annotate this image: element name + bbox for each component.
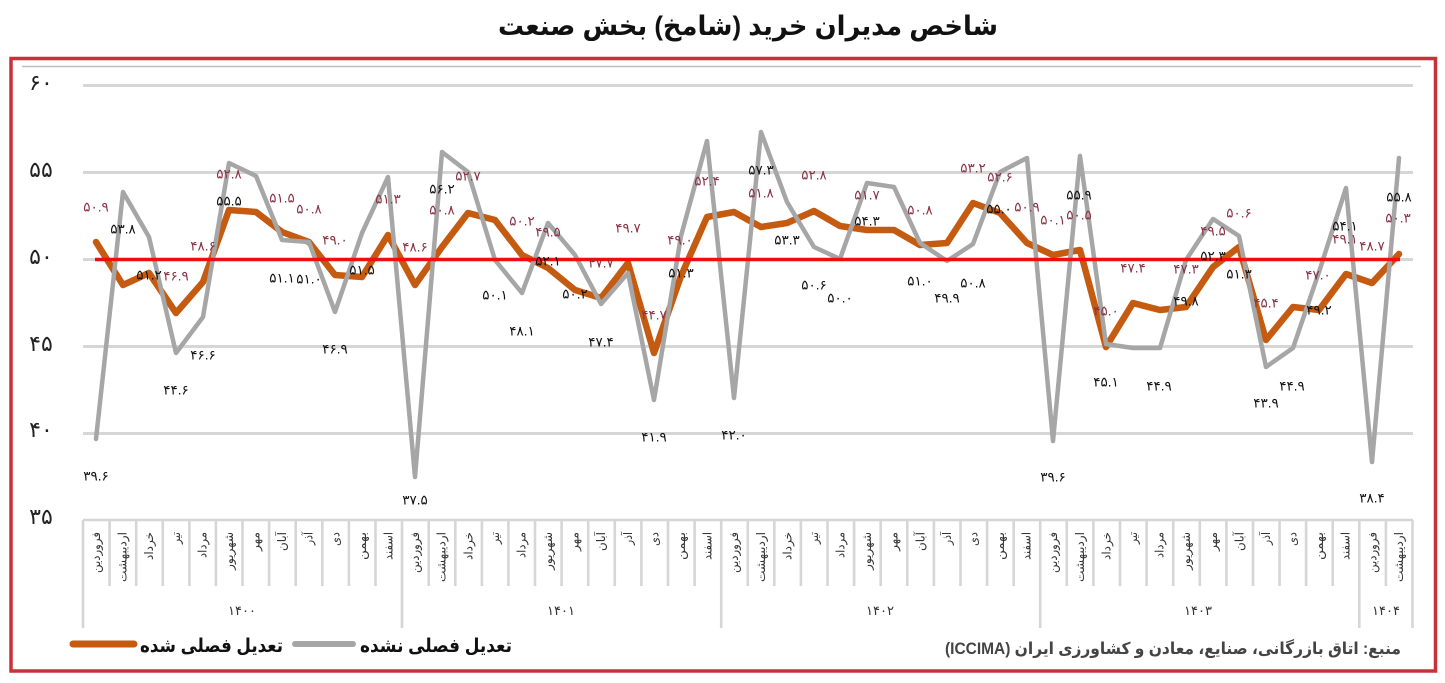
data labels: seasonally adjusted: ۴۹.۰	[322, 232, 348, 248]
data labels: not seasonally adjusted: ۴۳.۹	[1253, 396, 1279, 410]
x axis month labels: بهمن	[674, 532, 689, 560]
x axis month labels: آبان	[1231, 531, 1246, 551]
data labels: not seasonally adjusted: ۴۴.۶	[163, 382, 189, 398]
data labels: not seasonally adjusted: ۵۶.۲	[429, 182, 455, 196]
x axis month labels	[89, 531, 1407, 582]
data labels: not seasonally adjusted: ۵۳.۸	[110, 222, 136, 236]
line: seasonally adjusted (orange)	[96, 203, 1399, 353]
x axis month labels: دی	[966, 532, 980, 546]
data labels: not seasonally adjusted: ۳۹.۶	[83, 468, 109, 484]
data labels: not seasonally adjusted: ۵۱.۰	[907, 274, 933, 288]
data labels: seasonally adjusted: ۵۰.۶	[1226, 206, 1252, 220]
x axis month labels: فروردین	[727, 532, 742, 573]
data labels: seasonally adjusted: ۴۹.۵	[535, 224, 561, 240]
source note: منبع: اتاق بازرگانی، صنایع، معادن و کشاورزی ایران (ICCIMA)	[945, 638, 1401, 659]
data labels: seasonally adjusted: ۵۰.۵	[1066, 208, 1092, 222]
legend: not seasonally adjusted: تعدیل فصلی نشده	[360, 636, 512, 657]
data labels: not seasonally adjusted: ۴۹.۲	[1306, 302, 1332, 318]
data labels: not seasonally adjusted: ۵۰.۸	[960, 276, 986, 290]
y axis labels: ۴۰	[29, 417, 53, 442]
x axis month labels: اردیبهشت	[116, 532, 131, 582]
data labels: not seasonally adjusted: ۵۵.۸	[1386, 190, 1412, 204]
x axis month labels: شهریور	[1179, 532, 1194, 571]
data labels: not seasonally adjusted: ۵۰.۲	[562, 286, 588, 302]
y axis labels	[29, 70, 53, 529]
data labels: seasonally adjusted: ۵۱.۳	[375, 192, 401, 206]
x axis month labels: آذر	[301, 531, 317, 546]
x axis month labels: آبان	[593, 531, 608, 551]
data labels: seasonally adjusted: ۴۶.۹	[163, 268, 189, 284]
y axis labels: ۴۵	[29, 331, 53, 356]
x axis year labels: ۱۴۰۱	[547, 603, 575, 618]
data labels: not seasonally adjusted: ۴۴.۹	[1146, 378, 1172, 394]
x axis year labels	[228, 603, 1400, 618]
data labels: seasonally adjusted: ۴۸.۷	[1359, 238, 1385, 254]
line: not seasonally adjusted (grey)	[96, 132, 1399, 477]
data labels: not seasonally adjusted: ۵۲.۱	[535, 254, 561, 268]
data labels: not seasonally adjusted: ۴۲.۰	[721, 428, 747, 442]
x axis month labels: اسفند	[382, 532, 396, 560]
x axis month labels: اردیبهشت	[435, 532, 450, 582]
data labels: not seasonally adjusted: ۴۹.۹	[934, 290, 960, 306]
data labels: not seasonally adjusted: ۵۰.۰	[827, 290, 853, 306]
data labels: seasonally adjusted: ۵۲.۸	[216, 166, 242, 182]
data labels: seasonally adjusted: ۵۰.۳	[1385, 210, 1411, 226]
x axis month labels: خرداد	[1099, 532, 1114, 560]
data labels: seasonally adjusted: ۵۱.۸	[748, 186, 774, 200]
x axis month labels: بهمن	[355, 532, 370, 560]
data labels: seasonally adjusted: ۴۷.۰	[1305, 268, 1331, 282]
data labels: not seasonally adjusted: ۴۹.۸	[1173, 294, 1199, 308]
x axis month labels: فروردین	[408, 532, 423, 573]
data labels: seasonally adjusted: ۵۰.۱	[1040, 212, 1066, 228]
x axis month labels: مهر	[887, 532, 902, 552]
data labels: not seasonally adjusted: ۵۱.۲	[136, 268, 162, 282]
y axis labels: ۳۵	[29, 504, 53, 529]
x axis month labels: اردیبهشت	[754, 532, 769, 582]
x axis month labels: اسفند	[1020, 532, 1034, 560]
data labels: not seasonally adjusted: ۴۶.۶	[190, 348, 216, 362]
x axis month labels: فروردین	[89, 532, 104, 573]
x axis month labels: اردیبهشت	[1392, 532, 1407, 582]
data labels: seasonally adjusted: ۴۷.۷	[588, 256, 614, 270]
x axis month labels: شهریور	[222, 532, 237, 571]
x axis month labels: تیر	[1126, 532, 1141, 545]
data labels: seasonally adjusted: ۵۰.۲	[509, 214, 535, 228]
data labels: seasonally adjusted: ۵۲.۸	[801, 168, 827, 182]
data labels: not seasonally adjusted: ۵۰.۶	[801, 278, 827, 292]
data labels: seasonally adjusted: ۴۹.۷	[615, 220, 641, 236]
x axis month labels: تیر	[169, 532, 184, 545]
data labels: not seasonally adjusted: ۴۸.۱	[509, 324, 535, 338]
x axis month labels: مرداد	[514, 532, 529, 558]
data labels: seasonally adjusted: ۴۵.۰	[1093, 304, 1119, 318]
data labels: seasonally adjusted: ۵۱.۵	[269, 190, 295, 206]
x axis frame	[83, 520, 1413, 628]
x axis month labels: آذر	[1258, 531, 1274, 546]
data labels: seasonally adjusted: ۵۱.۷	[854, 188, 880, 202]
data labels: not seasonally adjusted: ۴۴.۹	[1279, 378, 1305, 394]
data labels: not seasonally adjusted: ۵۴.۱	[1332, 218, 1358, 234]
data labels: not seasonally adjusted: ۵۵.۵	[216, 194, 242, 208]
data labels: not seasonally adjusted: ۳۸.۴	[1359, 490, 1385, 506]
x axis month labels: مرداد	[834, 532, 848, 558]
data labels: seasonally adjusted: ۵۰.۸	[296, 202, 322, 216]
x axis month labels: تیر	[807, 532, 822, 545]
data labels: not seasonally adjusted: ۵۱.۵	[349, 262, 375, 278]
data labels: not seasonally adjusted: ۵۱.۱	[269, 270, 295, 286]
x axis month labels: آذر	[939, 531, 955, 546]
data labels: not seasonally adjusted: ۳۹.۶	[1040, 470, 1066, 484]
data labels: seasonally adjusted: ۴۹.۱	[1332, 232, 1358, 246]
x axis year labels: ۱۴۰۳	[1184, 603, 1212, 618]
data labels: seasonally adjusted: ۴۷.۳	[1173, 262, 1199, 276]
legend: seasonally adjusted: تعدیل فصلی شده	[140, 636, 283, 657]
x axis year labels: ۱۴۰۲	[866, 603, 894, 618]
x axis month labels: آذر	[620, 531, 636, 546]
data labels: not seasonally adjusted: ۴۷.۴	[588, 334, 614, 350]
data labels: seasonally adjusted: ۵۲.۶	[987, 170, 1013, 184]
data labels: not seasonally adjusted: ۵۷.۳	[748, 162, 774, 178]
data labels: seasonally adjusted: ۵۰.۸	[429, 202, 455, 218]
x axis month labels: تیر	[488, 532, 503, 545]
x axis month labels: خرداد	[780, 532, 795, 560]
x axis month labels: مرداد	[1153, 532, 1168, 558]
data labels: seasonally adjusted: ۴۴.۷	[641, 308, 667, 322]
x axis month labels: بهمن	[1312, 532, 1327, 560]
data labels: not seasonally adjusted: ۵۲.۳	[1200, 248, 1226, 264]
x axis month labels: آبان	[912, 531, 927, 551]
data labels: seasonally adjusted: ۵۰.۸	[907, 202, 933, 218]
data labels: not seasonally adjusted: ۵۳.۳	[774, 232, 800, 248]
title: شاخص مدیران خرید (شامخ) بخش صنعت	[498, 11, 998, 42]
data labels: seasonally adjusted: ۴۹.۵	[1200, 224, 1226, 238]
x axis month labels: فروردین	[1046, 532, 1061, 573]
data labels: not seasonally adjusted: ۵۰.۱	[482, 288, 508, 302]
x axis month labels: مهر	[1206, 532, 1221, 552]
x axis month labels: اردیبهشت	[1073, 532, 1088, 582]
data labels: seasonally adjusted: ۴۸.۶	[190, 238, 216, 254]
data labels: not seasonally adjusted: ۴۵.۱	[1093, 374, 1119, 390]
x axis month labels: دی	[1286, 532, 1300, 546]
x axis month labels: اسفند	[701, 532, 715, 560]
x axis month labels: اسفند	[1339, 532, 1353, 560]
data labels: not seasonally adjusted	[83, 162, 1412, 508]
x axis month labels: شهریور	[541, 532, 556, 571]
x axis month labels: فروردین	[1365, 532, 1380, 573]
x axis year labels: ۱۴۰۴	[1372, 603, 1400, 618]
data labels: seasonally adjusted: ۵۲.۴	[694, 174, 720, 188]
x axis month labels: مهر	[248, 532, 264, 552]
y axis labels: ۵۰	[29, 244, 53, 269]
data labels: not seasonally adjusted: ۵۱.۳	[1226, 266, 1252, 282]
x axis month labels: خرداد	[142, 532, 157, 560]
y axis labels: ۵۵	[29, 157, 53, 182]
data labels: seasonally adjusted: ۵۲.۷	[455, 168, 481, 184]
data labels: seasonally adjusted: ۵۰.۹	[83, 200, 109, 214]
x axis month labels: دی	[647, 532, 661, 546]
data labels: not seasonally adjusted: ۴۶.۹	[322, 342, 348, 356]
x axis month labels: مرداد	[195, 532, 210, 558]
data labels: seasonally adjusted	[83, 160, 1411, 322]
x axis month labels: خرداد	[461, 532, 476, 560]
data labels: not seasonally adjusted: ۵۵.۹	[1066, 188, 1092, 202]
x axis month labels: آبان	[274, 531, 289, 551]
x axis month labels: دی	[328, 532, 342, 546]
x axis year labels: ۱۴۰۰	[228, 603, 256, 618]
reference line at 50	[95, 258, 1400, 261]
data labels: seasonally adjusted: ۴۸.۶	[402, 240, 428, 254]
data labels: not seasonally adjusted: ۳۷.۵	[402, 492, 428, 508]
y axis labels: ۶۰	[29, 70, 53, 95]
data labels: not seasonally adjusted: ۵۵.۰	[986, 202, 1012, 216]
data labels: seasonally adjusted: ۴۹.۰	[667, 232, 693, 248]
data labels: not seasonally adjusted: ۵۴.۳	[854, 214, 880, 228]
data labels: not seasonally adjusted: ۴۱.۹	[641, 430, 667, 444]
x axis month labels: شهریور	[860, 532, 875, 571]
x axis month labels: بهمن	[993, 532, 1008, 560]
data labels: not seasonally adjusted: ۵۱.۳	[668, 266, 694, 280]
data labels: seasonally adjusted: ۵۰.۹	[1014, 200, 1040, 214]
x axis month labels: مهر	[568, 532, 583, 552]
data labels: seasonally adjusted: ۵۳.۲	[960, 160, 986, 176]
data labels: seasonally adjusted: ۴۷.۴	[1120, 260, 1146, 276]
data labels: seasonally adjusted: ۴۵.۴	[1253, 296, 1279, 310]
data labels: not seasonally adjusted: ۵۱.۰	[296, 272, 322, 286]
